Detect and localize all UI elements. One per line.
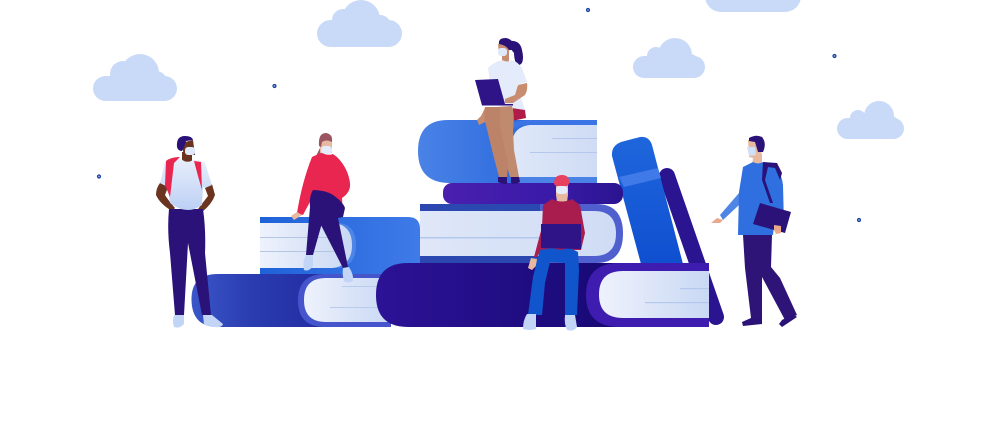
neck and face: [748, 140, 762, 165]
trousers: [168, 209, 211, 315]
cloud: far right: [837, 101, 904, 139]
book: large dark navy book: [376, 263, 709, 327]
book: upper left blue book: [260, 217, 420, 274]
person: man with folder, right: [711, 136, 797, 327]
shoes: [498, 177, 520, 184]
laptop: [541, 224, 581, 249]
mask: [556, 186, 568, 194]
hand: [774, 225, 781, 234]
trousers: [743, 235, 797, 320]
folder: [753, 203, 791, 233]
far hand: [711, 218, 723, 223]
hand: [291, 212, 302, 220]
mask: [185, 147, 195, 155]
hair: [499, 38, 514, 50]
skirt: [512, 106, 526, 121]
ponytail: [510, 41, 523, 65]
mask: [747, 147, 756, 156]
book: thin purple book: [443, 183, 623, 204]
book: blue leaning book: [612, 137, 683, 264]
crossed leg: [310, 190, 348, 268]
hair: [554, 175, 569, 186]
right arm: [505, 83, 527, 103]
t-shirt: [160, 159, 212, 210]
cloud: upper centre left: [317, 0, 402, 47]
backpack straps: [165, 157, 202, 197]
back leg: [306, 207, 322, 255]
hair: [177, 136, 193, 151]
hair: [749, 136, 765, 152]
shoes: [523, 314, 577, 331]
person: woman with laptop on top of books: [475, 38, 527, 184]
book band: [619, 168, 661, 187]
cloud: far left: [93, 54, 177, 101]
hair: [319, 133, 332, 147]
mask: [498, 48, 507, 56]
cloud: top edge: [705, 0, 801, 12]
face: [181, 140, 195, 155]
hand: [528, 258, 537, 270]
sweater: [297, 153, 350, 216]
arms: [156, 183, 215, 212]
shirt: [488, 60, 527, 110]
jeans: [528, 248, 579, 315]
decorative dots: [98, 8, 860, 222]
face and neck: [498, 44, 509, 62]
neck and face: [556, 184, 568, 202]
near leg: [484, 107, 508, 177]
shoes: [173, 315, 223, 328]
book: bottom left blue book: [191, 274, 391, 327]
person: woman in red sweater: [291, 133, 353, 282]
left hand: [477, 108, 488, 125]
ponytail: [316, 146, 322, 156]
shoes: [303, 255, 353, 282]
person: red-haired man with laptop: [523, 175, 585, 331]
face: [320, 140, 332, 153]
shoes: [742, 314, 797, 327]
far leg: [497, 106, 519, 177]
book: middle white-paged book: [420, 204, 623, 263]
cloud: upper right: [633, 38, 705, 78]
book: top blue book: [418, 120, 597, 183]
sweater: [738, 162, 784, 235]
far arm: [720, 193, 739, 220]
sweater: [534, 199, 585, 257]
laptop: [475, 79, 513, 106]
mask: [321, 146, 332, 154]
book: thin dark leaning book: [667, 176, 716, 317]
person: man with red backpack, left: [156, 136, 223, 328]
neck: [182, 152, 192, 164]
backpack strap: [762, 162, 782, 203]
